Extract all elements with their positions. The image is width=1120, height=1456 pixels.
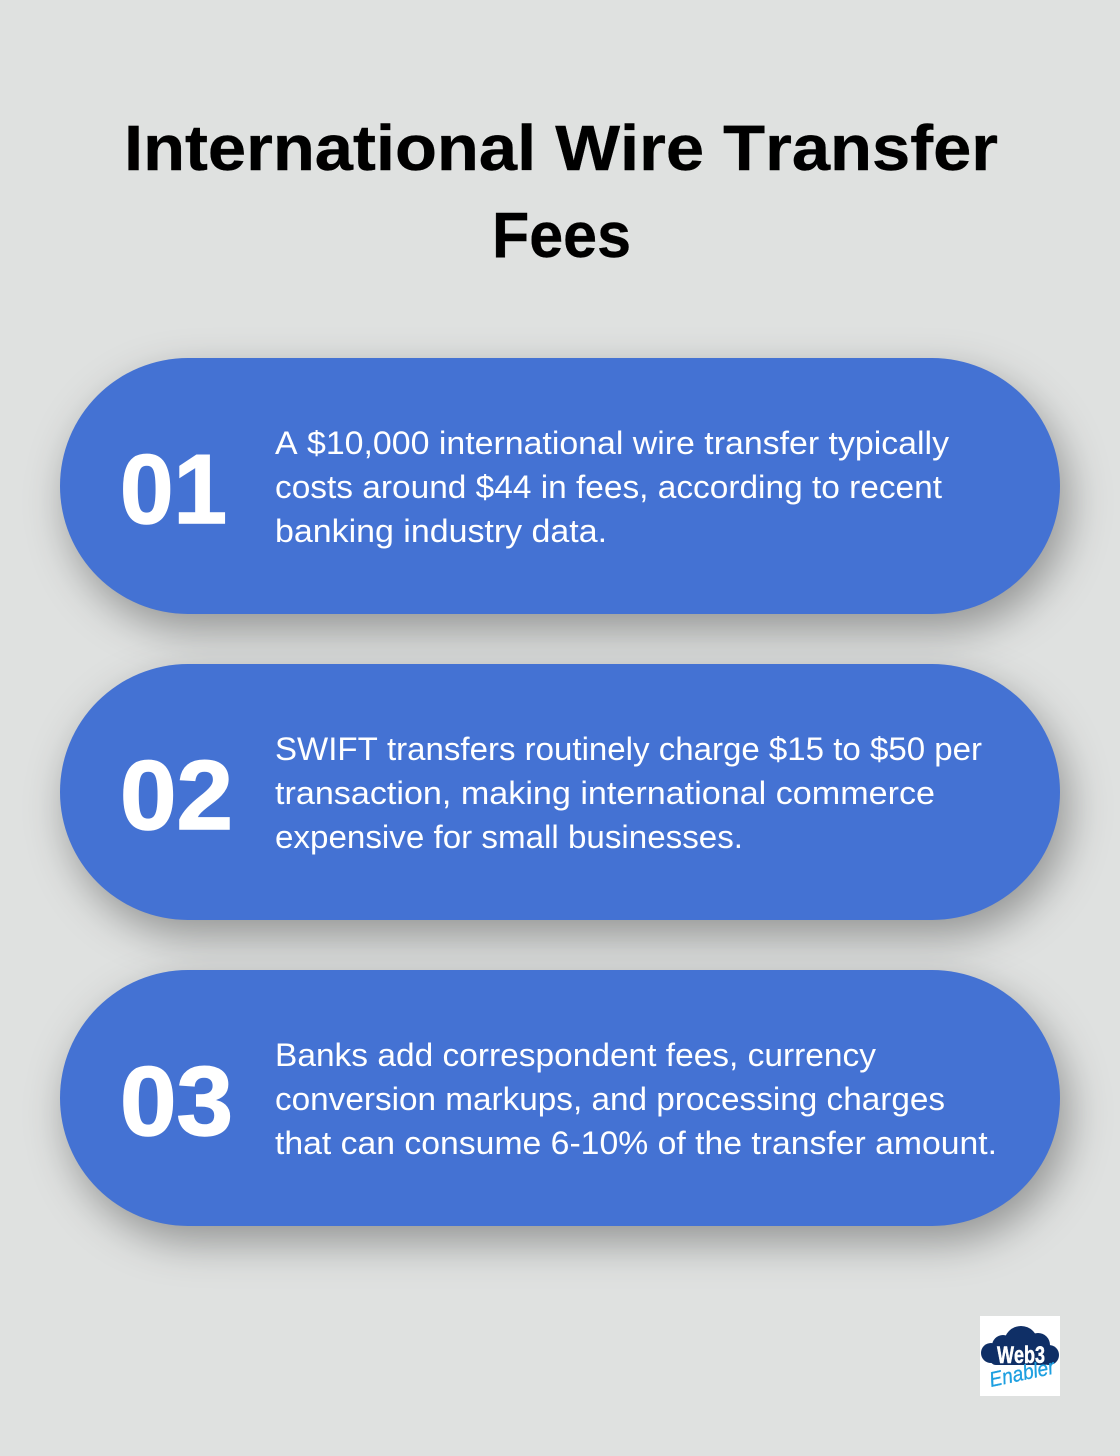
- title: Fees: [492, 199, 631, 271]
- icon: Web3 Enabler logo: Web3: [997, 1342, 1045, 1369]
- text: card 01: costs around $44 in fees, according to recent: [275, 469, 942, 505]
- text: card 03: [275, 1037, 997, 1161]
- icon: Web3 Enabler logo: Enabler: [987, 1355, 1057, 1392]
- text: card 03: Banks add correspondent fees, currency: [275, 1037, 876, 1073]
- text: card 02: SWIFT transfers routinely charge $15 to $50 per: [275, 731, 982, 767]
- icon: Web3 Enabler logo: [980, 1316, 1060, 1396]
- text: card 02: [275, 731, 982, 855]
- text: card 03: that can consume 6-10% of the transfer amount.: [275, 1125, 997, 1161]
- text: card 02: expensive for small businesses.: [275, 819, 743, 855]
- title: International Wire Transfer: [124, 112, 998, 184]
- title: [124, 112, 998, 271]
- text: card 01: A $10,000 international wire transfer typically: [275, 425, 949, 461]
- number 03: 03: [120, 1046, 233, 1156]
- panel: card 01: [60, 358, 1068, 630]
- number 01: 01: [120, 434, 227, 544]
- panel: card 03: [60, 970, 1068, 1242]
- text: card 03: conversion markups, and processing charges: [275, 1081, 945, 1117]
- text: card 01: [275, 425, 949, 549]
- text: card 01: banking industry data.: [275, 513, 607, 549]
- panel: card 02: [60, 664, 1068, 936]
- text: card 02: transaction, making international commerce: [275, 775, 935, 811]
- number 02: 02: [120, 740, 233, 850]
